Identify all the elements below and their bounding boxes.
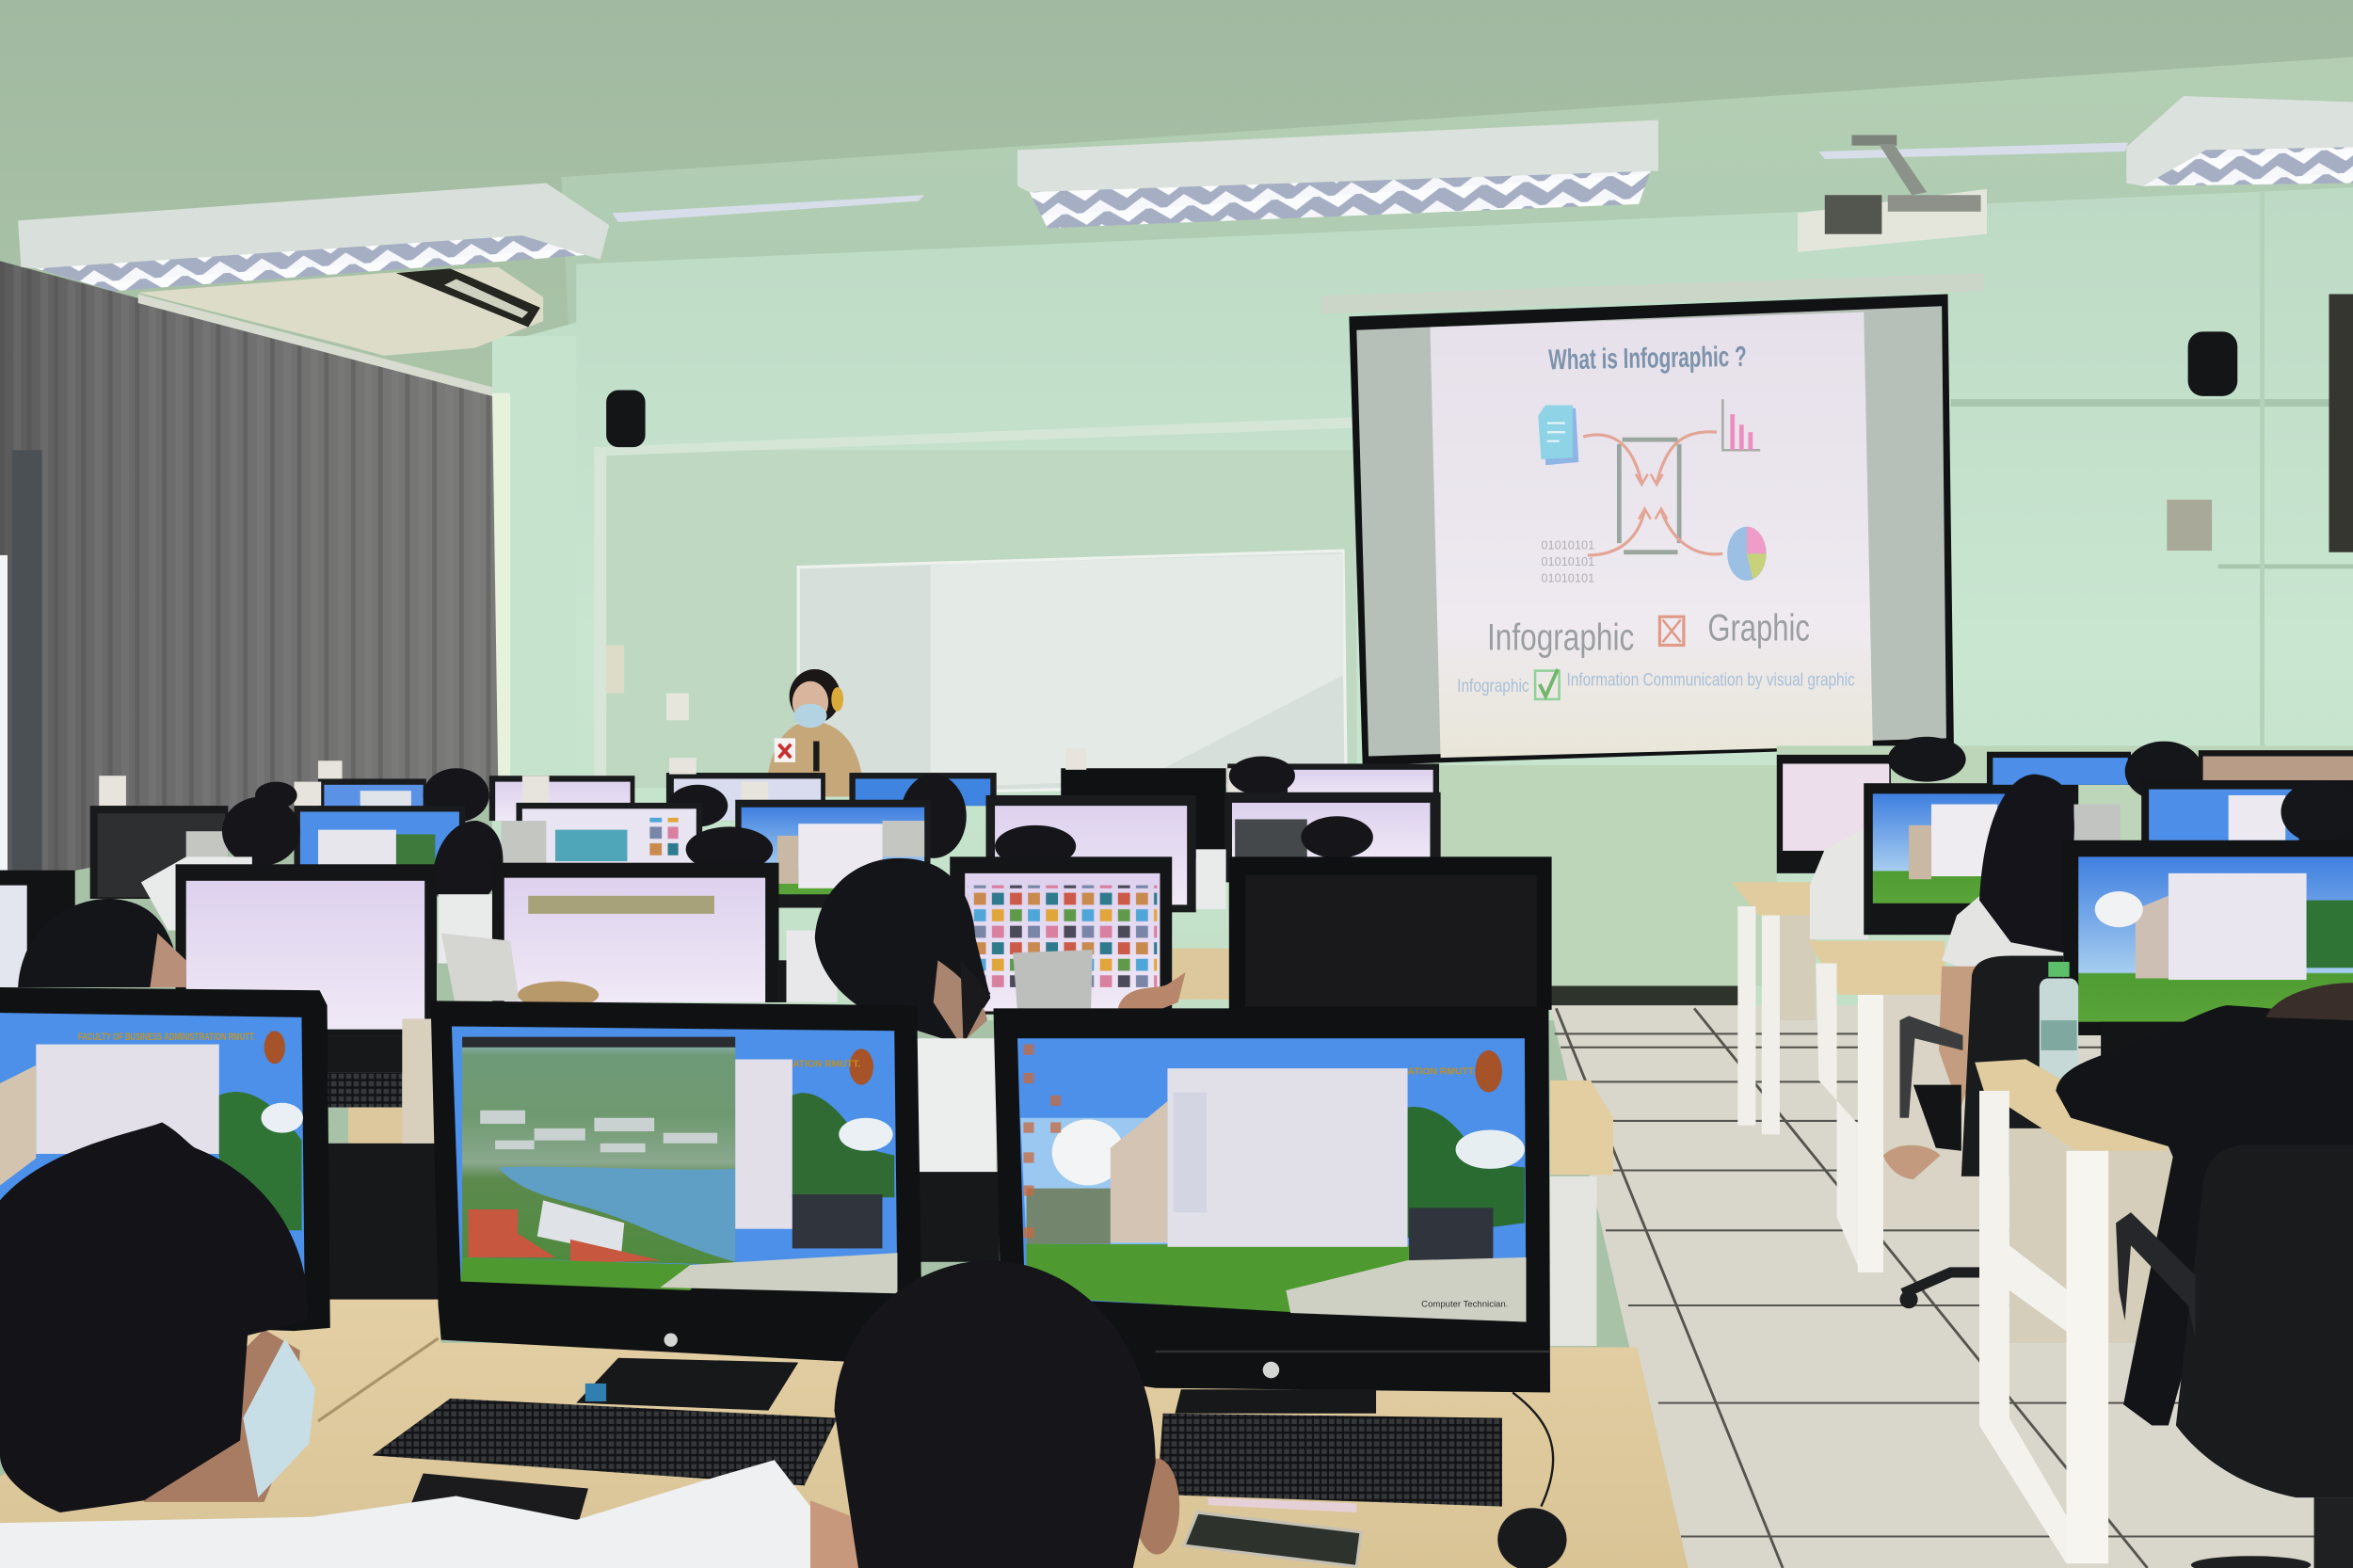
curtains: [0, 261, 498, 886]
monitor: mid wallpaper 2: [735, 800, 931, 908]
brand logo: [664, 1333, 678, 1347]
ceiling: [0, 0, 2353, 450]
monitor stand center: [1175, 1389, 1376, 1414]
paper on mid row: [186, 821, 924, 866]
emblem: [849, 1048, 873, 1085]
face mask: [243, 1338, 315, 1497]
monitor body: [431, 1000, 921, 1366]
trees: [792, 1093, 894, 1197]
left back desk and chair: [328, 1019, 1000, 1301]
window: [1167, 1068, 1408, 1247]
chair base: [1899, 1272, 1981, 1308]
student: back heads row two: [222, 797, 1373, 909]
second row of monitors: [0, 856, 1552, 1174]
keyboard center: [1157, 1414, 1502, 1507]
phone left: [411, 1474, 588, 1520]
air conditioner: [138, 267, 543, 356]
wallpaper heading: ATION RMUTT.: [1408, 1066, 1476, 1077]
icon: pie chart: [1727, 527, 1767, 581]
right back desks: [1732, 737, 2353, 1308]
speaker: left: [606, 391, 646, 447]
student: right long hair: [1939, 775, 2074, 1111]
monitor body: [993, 1008, 1550, 1392]
trees left: [1027, 1189, 1111, 1244]
monitor: mid lavender: [986, 795, 1196, 912]
light: distant strips: [613, 142, 2128, 222]
monitor: back row 4: [849, 773, 997, 806]
student: top right head: [2125, 742, 2203, 801]
icon: binary digits: 01010101: [1541, 571, 1594, 585]
chair: right front: [2116, 1144, 2353, 1568]
brand logo: [1263, 1362, 1279, 1378]
chair: mid right: [1883, 956, 2063, 1179]
people group: [1409, 1208, 1493, 1268]
desk: far right back: [1732, 882, 1816, 1134]
slide caption: Infographic: [1457, 677, 1529, 696]
icon: binary digits: 01010101: [1541, 537, 1594, 552]
icon: frame with arrows: [1583, 432, 1722, 555]
icon: binary digits: [1541, 537, 1594, 585]
speaker: right: [2188, 331, 2237, 396]
cloud: [1052, 1119, 1124, 1185]
baseboard: [1550, 985, 1753, 1005]
monitor: front left partial: [0, 987, 330, 1331]
wall panel right edge: [2329, 294, 2353, 552]
icon: check box: [1535, 669, 1560, 699]
projected slide: [1430, 312, 1873, 758]
back rows of monitors: [90, 749, 1441, 964]
aerial window: [462, 1037, 735, 1265]
icon: document: [1538, 405, 1578, 465]
monitor screen: [1017, 1038, 1526, 1322]
neck and ear: [144, 1330, 300, 1502]
icon: cross box: [1659, 616, 1684, 646]
monitor: second row far left: [0, 871, 75, 987]
student: blond head behind: [518, 982, 599, 1008]
chin line: [1156, 1351, 1550, 1352]
monitor: back row 2: [489, 776, 634, 821]
monitor: back row 3: [666, 773, 825, 821]
monitor: mid right: [1225, 792, 1441, 882]
file panel: [735, 1060, 792, 1229]
slide title: What is Infographic ?: [1548, 342, 1747, 376]
monitor: second row thumbnails: [950, 856, 1172, 1015]
light: left: [18, 183, 609, 291]
building: [1111, 1101, 1167, 1242]
desk: right front: [1975, 1060, 2173, 1563]
cloud: [839, 1118, 893, 1151]
sheets on back row: [99, 749, 1257, 806]
keyboard behind: [328, 1073, 402, 1108]
monitor: far right row 2: [2141, 780, 2353, 843]
monitor: far back left: [318, 778, 426, 808]
shirt: [0, 1460, 810, 1568]
paper sheets: [441, 934, 1093, 1012]
desk under second row center: [1172, 949, 1232, 1000]
caption strip: [661, 1253, 897, 1293]
hair: [0, 1123, 308, 1512]
student: front left: [0, 1123, 810, 1568]
monitor: right back: [1777, 755, 1891, 873]
buildings and roofs: [468, 1200, 661, 1263]
pen: [1208, 1497, 1356, 1512]
monitor: front left: [431, 1000, 921, 1366]
back wall: [492, 187, 2353, 1020]
icon: bar chart: [1722, 399, 1760, 450]
window title bar: [462, 1037, 735, 1048]
student: back heads row one: [255, 757, 1295, 858]
monitor: mid wallpaper left: [294, 806, 465, 869]
desk: mid right back: [1808, 941, 1984, 1272]
screen casing: [1321, 273, 1984, 313]
center desk: [0, 1080, 1689, 1568]
monitor: right wallpaper: [1864, 783, 2078, 935]
people group: [792, 1194, 883, 1248]
keyboard left: [372, 1399, 838, 1485]
monitor: back black: [1061, 768, 1226, 858]
student: back shirts: [141, 849, 1226, 964]
right sky and trees: [1408, 1107, 1525, 1238]
monitor: back right: [1227, 763, 1439, 800]
monitor screen: [452, 1026, 897, 1293]
paper right: [2073, 805, 2121, 841]
monitor: mid dark left: [90, 806, 228, 899]
student: right black shirt: [2056, 983, 2353, 1426]
light: right: [2126, 96, 2353, 186]
lawn: [1027, 1244, 1411, 1313]
projector: [1798, 135, 1987, 252]
presenter: [765, 669, 864, 797]
mouse and cable: [1497, 1392, 1567, 1568]
slide label: Infographic: Infographic: [1487, 616, 1634, 658]
campus blocks: [480, 1111, 717, 1152]
student: head left: [18, 899, 186, 987]
lake: [498, 1167, 735, 1262]
floor: [1550, 1005, 2353, 1568]
slide label: Graphic: Graphic: [1707, 608, 1810, 649]
caption text: Computer Technician.: [1421, 1300, 1508, 1310]
monitor: second row left: [176, 864, 437, 1073]
emblem: [1475, 1050, 1502, 1093]
wall box: [2167, 500, 2212, 551]
water bottle: [2040, 962, 2078, 1098]
lawn strip: [460, 1257, 705, 1290]
light: center: [1017, 120, 1658, 228]
monitor: far right row top: [1987, 750, 2353, 785]
slide caption: [1457, 671, 1855, 696]
monitor: front left partial: FACULTY OF BUSINESS ADMINISTRATION RMUTT.: [78, 1032, 255, 1043]
whiteboard: [798, 551, 1346, 795]
sky lower: [1020, 1118, 1167, 1244]
monitor: second row black back: [1229, 856, 1552, 1010]
caption panel: [1286, 1257, 1526, 1322]
wall switches: [606, 646, 689, 720]
student: head center: [815, 858, 997, 1174]
window sidebar: [1174, 1093, 1207, 1212]
monitor: front center: [993, 1008, 1550, 1392]
ceiling light fixtures: [18, 96, 2353, 291]
student: right back: [1810, 737, 1966, 939]
lower wall strip below screen: [1437, 765, 1777, 985]
icon: binary digits: 01010101: [1541, 554, 1594, 568]
phone center: [1184, 1512, 1361, 1566]
projection screen: [1321, 273, 1984, 765]
screen frame: [1349, 294, 1954, 765]
monitor: second row icons: [492, 863, 778, 1002]
chairs and shirt between monitors: [777, 930, 838, 1002]
monitor: mid icons: [516, 803, 702, 866]
slide caption: Information Communication by visual graphic: [1567, 671, 1855, 691]
wallpaper heading: ATION RMUTT.: [792, 1060, 860, 1070]
screen surface: [1356, 306, 1946, 757]
monitor: right large: [2063, 840, 2353, 1058]
student: front center: [810, 1260, 1179, 1568]
lower wall strip right: [1777, 745, 2353, 851]
speakers and wall fixtures: [606, 294, 2353, 720]
monitor stand left: [576, 1358, 798, 1411]
desktop icons: [1023, 1045, 1061, 1238]
hand pointing: [1118, 972, 1186, 1012]
